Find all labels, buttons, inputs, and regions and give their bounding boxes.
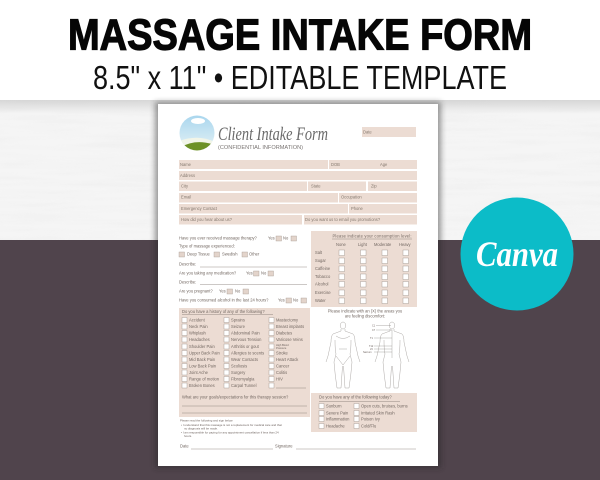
panel: consumption level: Water — [315, 298, 326, 303]
dark lower band — [0, 240, 600, 480]
contact fields: Occupation — [341, 194, 362, 200]
contact fields — [179, 160, 417, 224]
panel: medical history: Mastectomy — [276, 318, 299, 322]
massage questions: Yes — [278, 298, 285, 302]
massage questions: Describe: — [179, 280, 196, 284]
panel: consumption level: None — [336, 242, 347, 247]
panel: medical history: Carpal Tunnel — [231, 383, 257, 388]
contact fields: Do you want us to email you promotions? — [305, 217, 381, 222]
massage questions: No — [235, 288, 241, 294]
form heading script: Client Intake Form — [218, 125, 328, 145]
panel: today conditions: Inflammation — [326, 416, 350, 422]
contact fields: Address — [180, 173, 195, 178]
logo circle landscape — [179, 115, 215, 151]
panel: medical history: Seizure — [231, 324, 246, 329]
massage questions: Yes — [268, 236, 275, 240]
title: MASSAGE INTAKE FORM — [68, 10, 532, 60]
massage questions: Yes — [246, 270, 253, 276]
icon: back body outline with spine labels: T12 — [369, 345, 374, 348]
massage questions: Describe: — [179, 262, 196, 266]
panel: medical history: Allergies to scents — [231, 350, 264, 356]
signature line: Date — [180, 444, 189, 448]
contact fields: Age — [380, 162, 388, 167]
panel: goals — [179, 393, 310, 417]
panel: today conditions: Irritated Skin Rash — [361, 410, 395, 416]
panel: medical history: Arthritis or gout — [231, 344, 260, 349]
contact fields: How did you hear about us? — [181, 217, 233, 222]
icon: back body outline with spine labels: C7 — [372, 329, 376, 332]
panel: today conditions: Poison Ivy — [361, 416, 381, 422]
signature line: Signature — [275, 444, 293, 448]
panel: medical history: Upper Back Pain — [189, 350, 220, 356]
icon: back body outline with spine labels: Sacrum — [363, 351, 372, 354]
panel: medical history: Abdominal Pain — [231, 330, 260, 336]
panel: medical history: Wear Contacts — [231, 357, 258, 362]
panel: today conditions: Sunburn — [326, 404, 342, 408]
date field: Date — [363, 130, 372, 134]
body diagram heading: are feeling discomfort: — [345, 314, 385, 318]
massage questions: Are you pregnant? — [179, 288, 213, 294]
panel: medical history — [179, 308, 310, 393]
massage questions: Swedish — [222, 252, 238, 256]
panel: today conditions: Headache — [326, 424, 345, 428]
panel: medical history: Headaches — [189, 337, 210, 342]
page shadow — [155, 102, 441, 468]
panel: medical history: Pressure — [276, 346, 287, 350]
body diagram heading: Please indicate with an (X) the areas you — [328, 308, 402, 314]
contact fields: DOB — [331, 162, 340, 167]
consent text: • I understand that this massage is not a replacement for medical care and that — [181, 423, 282, 427]
icon: back body outline with spine labels: C1 — [372, 324, 376, 328]
panel: medical history: Broken Bones — [189, 383, 215, 388]
date field — [362, 127, 416, 137]
contact fields: City — [181, 184, 189, 188]
Canva badge: Canva — [476, 234, 558, 274]
panel: medical history: Sprains — [231, 318, 245, 322]
contact fields: State — [311, 184, 321, 188]
panel: consumption level: Please indicate your consumption level: — [332, 234, 412, 238]
panel: medical history: Mid Back Pain — [189, 357, 216, 362]
icon: back body outline with spine labels — [363, 322, 409, 388]
panel: medical history: Varicose Veins — [276, 337, 303, 342]
consent text: hours. — [184, 434, 192, 438]
panel: medical history: Neck Pain — [189, 324, 208, 329]
panel: consumption level: Light — [358, 242, 368, 247]
panel: consumption level: Salt — [315, 250, 323, 255]
panel: today conditions: Cold/Flu — [361, 424, 376, 428]
consent text: • I am responsible for paying for any appointment cancellation if less than 24 — [181, 430, 279, 434]
panel: today conditions: Do you have any of the following today? — [319, 394, 392, 400]
panel: medical history: Cancer — [276, 364, 290, 368]
massage questions: Yes — [219, 288, 226, 294]
icon: back body outline with spine labels: L5 — [370, 348, 373, 351]
panel: medical history: Do you have a history of any of the following? — [182, 309, 265, 314]
confidential note: (CONFIDENTIAL INFORMATION) — [218, 145, 303, 151]
massage questions: No — [261, 270, 267, 276]
consent text: Please read the following and sign below: — [180, 418, 233, 422]
panel: medical history: Scoliosis — [231, 364, 247, 368]
panel: medical history: Range of motion — [189, 376, 220, 382]
subtitle: 8.5" x 11" • EDITABLE TEMPLATE — [93, 59, 507, 96]
massage questions: Have you ever received massage therapy? — [179, 236, 258, 240]
panel: medical history: High Blood — [276, 343, 289, 347]
panel: consumption level: Sugar — [315, 258, 327, 263]
signature line — [180, 444, 416, 449]
massage questions — [179, 236, 307, 303]
panel: consumption level — [311, 231, 417, 307]
consent text — [180, 418, 282, 438]
panel: medical history: Stroke — [276, 350, 289, 356]
massage questions: Other — [249, 252, 260, 256]
consent text: no diagnosis will be made. — [184, 426, 218, 430]
icon: front body outline — [326, 322, 360, 388]
panel: medical history: Colitis — [276, 370, 287, 375]
panel: consumption level: Tobacco — [315, 274, 331, 279]
panel: medical history: Breast implants — [276, 324, 304, 329]
wood background — [0, 100, 600, 240]
contact fields: Name — [180, 162, 192, 167]
panel: medical history: Surgery — [231, 370, 246, 375]
panel: today conditions: Severe Pain — [326, 410, 349, 416]
contact fields: Email — [181, 194, 191, 200]
massage questions: Type of massage experienced: — [179, 244, 235, 248]
panel: goals: What are your goals/expectations for this therapy session? — [182, 394, 289, 400]
panel: consumption level: Caffeine — [315, 266, 331, 271]
massage questions: No — [283, 236, 289, 240]
panel: today conditions: Open cuts, bruises, burns — [361, 404, 408, 408]
contact fields: Emergency Contact — [181, 206, 218, 211]
panel: today conditions — [311, 393, 417, 432]
panel: consumption level: Moderate — [374, 242, 392, 247]
body diagram heading — [328, 308, 402, 318]
massage questions: Deep Tissue — [187, 252, 210, 256]
massage questions: Have you consumed alcohol in the last 24 hours? — [179, 298, 269, 302]
panel: consumption level: Alcohol — [315, 282, 329, 286]
panel: medical history: Shoulder Pain — [189, 344, 215, 349]
panel: medical history: Accident — [189, 318, 206, 322]
panel: consumption level: Heavy — [399, 242, 412, 247]
panel: medical history: Heart Attack — [276, 357, 299, 362]
panel: consumption level: Exercise — [315, 290, 331, 295]
panel: medical history: Joint Ache — [189, 370, 209, 375]
massage questions: Are you taking any medication? — [179, 270, 237, 276]
panel: medical history: Nervous Tension — [231, 337, 262, 342]
Canva badge — [460, 198, 574, 310]
panel: medical history: Diabetes — [276, 330, 292, 336]
form page — [158, 104, 438, 466]
panel: medical history: HIV — [276, 376, 283, 382]
massage questions: No — [293, 298, 299, 302]
icon: back body outline with spine labels: T1 — [370, 337, 374, 340]
panel: medical history: Low Back Pain — [189, 364, 217, 368]
panel: medical history: Fibromyalgia — [231, 376, 255, 382]
panel: medical history: Whiplash — [189, 330, 207, 336]
contact fields: Zip — [371, 184, 377, 188]
contact fields: Phone — [351, 206, 364, 211]
